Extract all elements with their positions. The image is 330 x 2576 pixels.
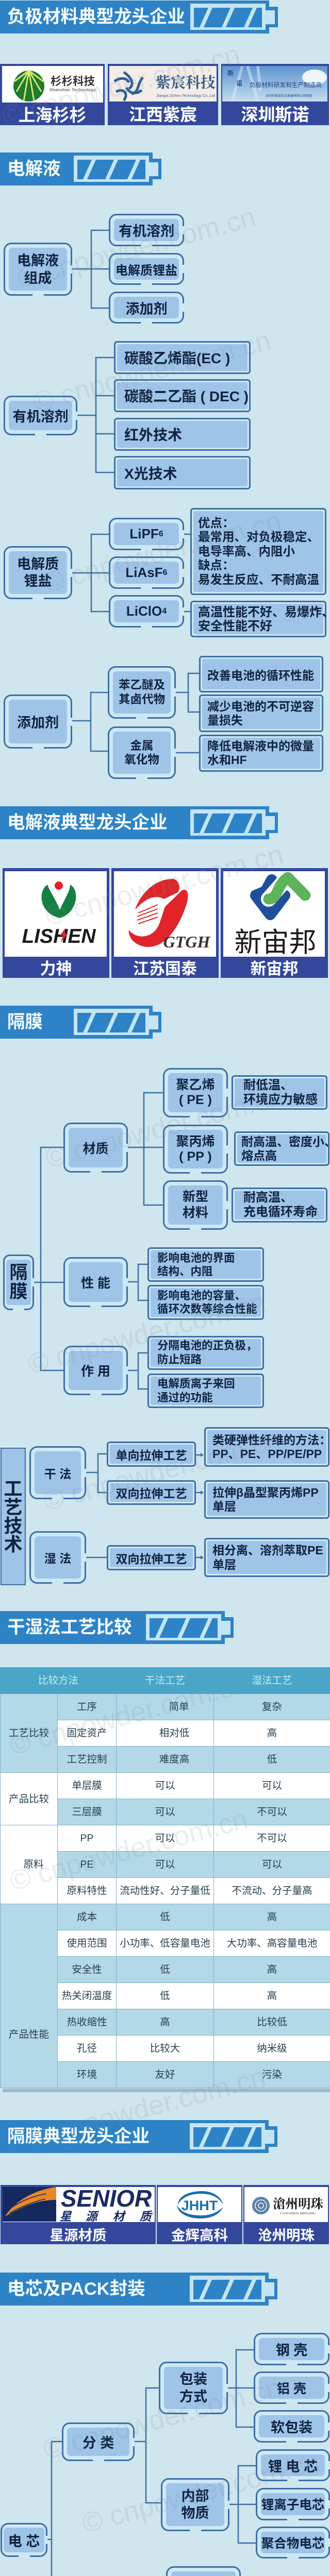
item: EC: [114, 341, 251, 374]
effect: capacity loss: 量损失: [207, 713, 243, 726]
heading: anode leading companies: 负极材料典型龙头企业: [7, 7, 185, 27]
connector: main trunk: [47, 2441, 62, 2576]
table: dry vs wet process comparison: 低: [160, 1964, 170, 1975]
logo: Shanshan Technology: 杉杉科技: [51, 75, 95, 88]
table: dry vs wet process comparison: 原料: [23, 1859, 43, 1870]
node: performance: 性 能: [81, 1276, 110, 1290]
node: function: [63, 1346, 128, 1395]
note: LiPF6 pros and cons: [190, 508, 326, 595]
panel: process technology tree: [1, 1427, 330, 1585]
table: dry vs wet process comparison: 可以: [155, 1806, 175, 1818]
node: performance: [63, 1257, 128, 1307]
panel: anode company logos: [0, 64, 329, 125]
table: dry vs wet process comparison: 可以: [262, 1859, 282, 1870]
node: separator: 膜: [9, 1282, 28, 1302]
node: phenyl ether and halides: 其卤代物: [119, 693, 165, 706]
node: LiAsF6: 6: [163, 568, 168, 577]
table: dry vs wet process comparison: 高: [160, 2016, 170, 2028]
caption: 星源材质: [50, 2227, 106, 2243]
heading: anode leading companies: [0, 1, 269, 33]
item: DEC: [114, 379, 251, 412]
node: metal oxide: 氧化物: [124, 753, 159, 766]
logo: Zichen Technology: Jiangxi Zichen Technology Co.,Ltd: [156, 93, 215, 98]
table: dry vs wet process comparison: 小功率、低容量电池: [120, 1938, 210, 1949]
table: dry vs wet process comparison: 三层膜: [72, 1806, 102, 1818]
table: dry vs wet process comparison: 可以: [155, 1859, 175, 1870]
connector: dry and wet branches: [86, 1453, 107, 1558]
function: ion passage: 电解质离子来回: [157, 1378, 235, 1390]
logo card: Capchem: [221, 868, 328, 978]
logo: Zichen Technology: [109, 66, 217, 101]
leaf: lithium cell: [256, 2449, 330, 2481]
logo: Zichen Technology: 紫宸科技: [156, 74, 216, 91]
connector: main trunk: [34, 1147, 63, 1371]
caption: 沧州明珠: [258, 2227, 315, 2243]
node: wet process: 湿 法: [44, 1552, 71, 1565]
node: lithium salt: [109, 253, 184, 285]
logo: Shanshan Technology: Shanshan Technology: [50, 87, 96, 92]
table: dry vs wet process comparison: 难度高: [159, 1754, 189, 1765]
logo card: Jinhui: [157, 2185, 242, 2244]
logo card: Senior: [1, 2185, 156, 2244]
table: dry vs wet process comparison: 成本: [77, 1911, 97, 1923]
panel: cell tree: [1, 2333, 330, 2576]
node: cell: 电 芯: [8, 2534, 40, 2549]
caption: 江苏国泰: [133, 960, 197, 978]
table: dry vs wet process comparison: 友好: [155, 2069, 175, 2080]
watermarks: © cnpowder.com.cn: [30, 325, 274, 418]
note: wet result: 单层: [212, 1558, 236, 1571]
heading: dry vs wet comparison: 干湿法工艺比较: [7, 1618, 132, 1637]
node: separator: 隔: [9, 1263, 28, 1283]
heading: cell and pack: [0, 2273, 269, 2306]
watermarks: © cnpowder.com.cn: [7, 1804, 251, 1897]
leaf: aluminum shell: [254, 2371, 329, 2404]
note: PE traits: [232, 1075, 327, 1110]
table: dry vs wet process comparison: 复杂: [262, 1701, 282, 1713]
effect: interface: [147, 1247, 264, 1282]
node: LiAsF6: [109, 556, 184, 589]
node: PE: 聚乙烯: [176, 1078, 214, 1092]
watermarks: © cnpowder.com.cn: [25, 1287, 269, 1380]
logo: Senior: [3, 2187, 155, 2222]
node: electrolyte lithium salt: 电解质: [17, 556, 59, 572]
panel: separator company logos: [1, 2185, 329, 2244]
logo card: Cangzhou Mingzhu: [243, 2185, 329, 2244]
item: X-ray: X光技术: [124, 466, 177, 481]
label: process technology: 技: [4, 1515, 23, 1536]
step: uniaxial stretching: [107, 1442, 196, 1467]
caption: 深圳斯诺: [241, 105, 309, 124]
logo: Lishen: LISHEN: [22, 925, 96, 947]
node: organic solvent: 有机溶剂: [12, 409, 68, 425]
connector: packaging branch: [228, 2349, 254, 2428]
effect: interface: 结构、内阻: [157, 1265, 213, 1278]
watermarks: © cnpowder.com.cn: [0, 39, 243, 132]
node: LiPF6: 6: [159, 530, 163, 538]
node: LiClO4: [109, 595, 184, 628]
logo: Sinuo banner: [222, 66, 327, 101]
note: wet result: [204, 1538, 329, 1577]
note: uniaxial result: 类硬弹性纤维的方法：: [212, 1433, 330, 1447]
table: dry vs wet process comparison: 工艺比较: [9, 1727, 49, 1739]
watermarks: © cnpowder.com.cn: [42, 1081, 287, 1174]
table: dry vs wet process comparison: [0, 1667, 330, 2088]
effect: capacity loss: 减少电池的不可逆容: [207, 700, 314, 713]
table: dry vs wet process comparison: 环境: [77, 2069, 97, 2080]
node: additive: [109, 292, 184, 324]
table: dry vs wet process comparison: 污染: [262, 2069, 282, 2080]
logo: Cangzhou Mingzhu: [244, 2187, 328, 2222]
leaf: Al-Ni strip: [166, 2566, 241, 2576]
logo: Sinuo banner: 负极材料研发和生产制造商: [250, 81, 322, 89]
caption: 上海杉杉: [19, 106, 87, 125]
table: dry vs wet process comparison: 可以: [155, 1780, 175, 1791]
node: new material: 新型: [183, 1190, 208, 1204]
logo card: Sinuo: [221, 64, 329, 125]
note: wet result: 相分离、溶剂萃取PE: [212, 1544, 323, 1557]
note: PE traits: 耐低温、: [243, 1078, 293, 1092]
node: classification: [62, 2422, 135, 2461]
panel: lithium salt tree: [4, 508, 330, 637]
node: LiClO4: LiClO: [126, 603, 162, 619]
effect: interface: 影响电池的界面: [157, 1252, 235, 1264]
note: LiPF6 pros and cons: 易发生反应、不耐高温: [198, 573, 319, 586]
logo card: Zichen: [108, 64, 218, 125]
effect: cycling: 改善电池的循环性能: [207, 669, 314, 682]
table: dry vs wet process comparison: 原料特性: [67, 1885, 107, 1896]
leaf: soft pack: [254, 2410, 329, 2443]
node: dry process: 干 法: [44, 1467, 71, 1481]
watermarks: © cnpowder.com.cn: [7, 1668, 251, 1761]
function: isolate electrodes: 防止短路: [157, 1353, 202, 1366]
node: organic solvent: 有机溶剂: [119, 224, 174, 239]
note: LiClO4 drawbacks: [190, 601, 326, 637]
connector: performance branch: [128, 1263, 147, 1301]
table: dry vs wet process comparison: 安全性: [72, 1964, 102, 1975]
node: packaging: [159, 2362, 228, 2414]
node: metal oxide: 金属: [130, 739, 154, 752]
panel: separator tree: [3, 1068, 330, 1408]
logo: Shanshan Technology: [2, 66, 103, 103]
leaf: steel shell: [254, 2333, 329, 2365]
logo card: Lishen: [3, 868, 109, 978]
item: X-ray: [114, 456, 251, 489]
note: LiPF6 pros and cons: 优点：: [198, 516, 234, 530]
node: electrolyte composition: 电解液: [17, 252, 59, 268]
table: dry vs wet process comparison: 高: [267, 1990, 277, 2002]
effect: capacity: 循环次数等综合性能: [157, 1303, 257, 1315]
table: dry vs wet process comparison: 湿法工艺: [252, 1675, 292, 1686]
table: dry vs wet process comparison: 高: [267, 1727, 277, 1739]
note: uniaxial result: [204, 1427, 329, 1467]
caption: 江西紫宸: [129, 105, 197, 124]
table: dry vs wet process comparison: 固定资产: [67, 1727, 107, 1739]
item: EC: 碳酸乙烯酯(EC ): [124, 350, 230, 366]
arrows to notes: [196, 1453, 204, 1560]
connector: [77, 357, 114, 473]
leaf: lithium-ion cell: [256, 2488, 330, 2520]
step: biaxial stretching dry: 双向拉伸工艺: [116, 1487, 187, 1500]
leaf: soft pack: 软包装: [271, 2420, 312, 2435]
node: LiAsF6: LiAsF: [125, 565, 163, 580]
node: material: [63, 1123, 128, 1173]
table: dry vs wet process comparison: 低: [160, 1911, 170, 1923]
leaf: lithium cell: 锂 电 芯: [268, 2459, 318, 2474]
node: material: 材质: [82, 1142, 108, 1156]
node: LiClO4: 4: [162, 607, 167, 615]
caption: 金辉高科: [171, 2227, 228, 2243]
node: LiPF6: [109, 518, 184, 550]
table: dry vs wet process comparison: 产品比较: [9, 1793, 49, 1804]
caption: 力神: [40, 960, 72, 978]
node: PP: [163, 1125, 228, 1174]
node: cell: [1, 2523, 47, 2557]
node: packaging: 包装: [179, 2371, 207, 2387]
label: process technology: 艺: [4, 1496, 23, 1518]
table shadow bar: [3, 2089, 330, 2092]
node: phenyl ether and halides: 苯乙醚及: [119, 679, 165, 691]
table: dry vs wet process comparison: 工艺控制: [67, 1754, 107, 1765]
node: additive: 添加剂: [17, 715, 59, 731]
function: ion passage: [147, 1374, 264, 1408]
node: PE: ( PE ): [179, 1093, 212, 1107]
table: dry vs wet process comparison: 不可以: [257, 1806, 287, 1818]
table: dry vs wet process comparison: 热关闭温度: [62, 1990, 112, 2002]
node: organic solvent: [109, 214, 184, 246]
table: dry vs wet process comparison: 孔径: [77, 2043, 97, 2054]
node: function: 作 用: [81, 1364, 110, 1379]
panel: organic solvent tree: [4, 341, 251, 489]
step: biaxial stretching dry: [107, 1480, 196, 1505]
node: wet process: [29, 1531, 86, 1584]
panel: electrolyte composition tree: [4, 214, 184, 324]
node: classification: 分 类: [82, 2435, 114, 2451]
table: dry vs wet process comparison: 比较低: [257, 2016, 287, 2028]
watermarks: © cnpowder.com.cn: [42, 839, 287, 932]
node: LiPF6: LiPF: [129, 526, 159, 541]
note: PP traits: 熔点高: [241, 1149, 277, 1162]
table: dry vs wet process comparison: 流动性好、分子量低: [120, 1885, 210, 1896]
table: dry vs wet process comparison: PP: [80, 1833, 94, 1844]
leaf: aluminum shell: 铝 壳: [277, 2381, 306, 2396]
leaf: polymer cell: [256, 2527, 330, 2558]
node: dry process: [29, 1446, 86, 1499]
node: phenyl ether and halides: [108, 666, 176, 719]
note: LiPF6 pros and cons: 电导率高、内阻小: [198, 545, 295, 558]
logo card: Shanshan: [0, 64, 105, 125]
node: internal material: [161, 2478, 229, 2531]
node: internal material: 物质: [182, 2505, 209, 2520]
effect: capacity: 影响电池的容量、: [157, 1290, 246, 1302]
table: dry vs wet process comparison: 比较大: [150, 2043, 180, 2054]
connector: material branch: [128, 1092, 163, 1206]
logo: GTGH: [114, 871, 216, 957]
effect: capacity: [147, 1285, 264, 1320]
table: dry vs wet process comparison: 高: [267, 1964, 277, 1975]
table: dry vs wet process comparison: 产品性能: [9, 2029, 49, 2040]
node: new material: 材料: [183, 1206, 208, 1220]
watermarks: © cnpowder.com.cn: [25, 2061, 269, 2155]
note: biaxial result: 拉伸β晶型聚丙烯PP: [212, 1486, 319, 1499]
table: dry vs wet process comparison: 不流动、分子量高: [232, 1885, 312, 1896]
table: dry vs wet process comparison: 简单: [169, 1701, 189, 1713]
table: dry vs wet process comparison: 相对低: [159, 1727, 189, 1739]
effect: moisture and HF: [199, 735, 323, 772]
node: internal material: 内部: [182, 2488, 209, 2504]
item: infrared: [114, 418, 251, 451]
heading: dry vs wet comparison: [0, 1611, 225, 1644]
table: dry vs wet process comparison: 不可以: [257, 1833, 287, 1844]
connector: [72, 534, 190, 612]
note: uniaxial result: PP、PE、PP/PE/PP: [212, 1447, 322, 1460]
node: additive: 添加剂: [126, 301, 167, 316]
connector: [72, 673, 199, 753]
connector: function branch: [128, 1352, 147, 1390]
table: dry vs wet process comparison: 高: [267, 1911, 277, 1923]
table: dry vs wet process comparison: 热收缩性: [67, 2016, 107, 2028]
leaf: polymer cell: 聚合物电芯: [261, 2537, 324, 2550]
logo: JHHT: JHHT: [182, 2198, 218, 2213]
node: PP: ( PP ): [179, 1149, 212, 1163]
node: lithium salt: 电解质锂盐: [116, 264, 177, 277]
note: LiClO4 drawbacks: 安全性能不好: [198, 619, 272, 633]
table: dry vs wet process comparison: 工序: [77, 1701, 97, 1713]
heading: separator: 隔膜: [7, 1012, 43, 1032]
logo: Sinuo banner: 深圳市斯诺实业发展有限公司制造: [266, 94, 312, 98]
node: PP: 聚丙烯: [176, 1134, 214, 1149]
panel: electrolyte company logos: [3, 868, 328, 978]
logo: Cangzhou Mingzhu: CANGZHOU MINGZHU: [280, 2212, 316, 2215]
item: DEC: 碳酸二乙酯 ( DEC ): [124, 388, 249, 404]
note: PP traits: [234, 1131, 329, 1166]
note: new material traits: 充电循环寿命: [243, 1205, 318, 1219]
leaf: steel shell: 钢 壳: [276, 2343, 307, 2358]
logo card: Guotai: [111, 868, 219, 978]
function: isolate electrodes: [147, 1336, 264, 1370]
node: packaging: 方式: [179, 2389, 207, 2404]
heading: separator leading companies: 隔膜典型龙头企业: [7, 2127, 150, 2146]
watermarks: © cnpowder.com.cn: [79, 2446, 323, 2539]
caption: 新宙邦: [251, 960, 298, 978]
logo: Sinuo banner: 诺: [236, 79, 242, 87]
table: dry vs wet process comparison: 比较方法: [38, 1675, 78, 1686]
table: dry vs wet process comparison: 使用范围: [67, 1938, 107, 1949]
table: dry vs wet process comparison: PE: [80, 1859, 94, 1870]
node: separator: [3, 1255, 34, 1310]
note: PE traits: 环境应力敏感: [243, 1092, 318, 1107]
logo: GTGH: GTGH: [163, 933, 210, 951]
heading: separator leading companies: [0, 2120, 269, 2153]
effect: cycling: [199, 656, 323, 692]
function: isolate electrodes: 分隔电池的正负极，: [157, 1340, 257, 1352]
table: dry vs wet process comparison: 可以: [155, 1833, 175, 1844]
watermarks: © cnpowder.com.cn: [40, 505, 285, 599]
item: infrared: 红外技术: [124, 427, 182, 443]
node: electrolyte lithium salt: 锂盐: [24, 573, 52, 588]
logo: Lishen: [5, 871, 107, 957]
note: LiPF6 pros and cons: 缺点：: [198, 558, 234, 572]
label: process technology: [1, 1448, 26, 1585]
heading: electrolyte: 电解液: [7, 159, 61, 179]
logo: Sinuo banner: 斯: [227, 69, 234, 77]
node: metal oxide: [108, 726, 176, 779]
heading: separator: [0, 1006, 153, 1039]
watermarks: © cnpowder.com.cn: [14, 201, 259, 295]
panel: additive tree: [4, 656, 323, 779]
effect: moisture and HF: 水和HF: [207, 753, 247, 767]
step: uniaxial stretching: 单向拉伸工艺: [116, 1449, 187, 1462]
node: additive: [4, 694, 72, 749]
effect: capacity loss: [199, 694, 323, 732]
label: process technology: 工: [4, 1478, 23, 1499]
function: ion passage: 通过的功能: [157, 1391, 213, 1403]
table: dry vs wet process comparison: 低: [160, 1990, 170, 2002]
node: PE: [163, 1068, 228, 1117]
connector: classification branch: [135, 2387, 161, 2504]
note: new material traits: 耐高温、: [243, 1191, 293, 1205]
heading: electrolyte: [0, 152, 153, 185]
note: new material traits: [232, 1188, 327, 1223]
node: new material: [163, 1180, 228, 1230]
connector: [72, 230, 109, 309]
note: LiPF6 pros and cons: 最常用、对负极稳定、: [198, 530, 319, 544]
node: organic solvent: [4, 396, 77, 435]
label: process technology: 术: [4, 1533, 23, 1555]
connector: internal material branch: [229, 2465, 256, 2544]
heading: cell and pack: 电芯及PACK封装: [7, 2279, 145, 2299]
table: dry vs wet process comparison: 干法工艺: [145, 1675, 185, 1686]
logo: Cangzhou Mingzhu: 滄州明珠: [273, 2194, 323, 2212]
leaf: lithium-ion cell: 锂离子电芯: [261, 2498, 324, 2512]
logo: JHHT: [158, 2187, 241, 2222]
table: dry vs wet process comparison: 纳米级: [257, 2043, 287, 2054]
node: electrolyte lithium salt: [4, 546, 72, 599]
logo: Capchem: [223, 871, 325, 957]
table: dry vs wet process comparison: 低: [267, 1754, 277, 1765]
watermarks: © cnpowder.com.cn: [40, 2372, 285, 2465]
watermarks: © cnpowder.com.cn: [40, 1424, 285, 1517]
table: dry vs wet process comparison: 大功率、高容量电池: [227, 1938, 317, 1949]
table: dry vs wet process comparison: 单层膜: [72, 1780, 102, 1791]
note: biaxial result: 单层: [212, 1499, 236, 1513]
step: biaxial stretching wet: 双向拉伸工艺: [116, 1552, 187, 1565]
heading: electrolyte leading companies: 电解液典型龙头企业: [7, 813, 167, 833]
table: dry vs wet process comparison: 可以: [262, 1780, 282, 1791]
note: biaxial result: [204, 1480, 329, 1519]
node: electrolyte composition: 组成: [24, 270, 52, 285]
effect: moisture and HF: 降低电解液中的微量: [207, 739, 314, 753]
node: electrolyte composition: [4, 243, 72, 296]
step: biaxial stretching wet: [107, 1545, 196, 1570]
heading: electrolyte leading companies: [0, 806, 269, 839]
